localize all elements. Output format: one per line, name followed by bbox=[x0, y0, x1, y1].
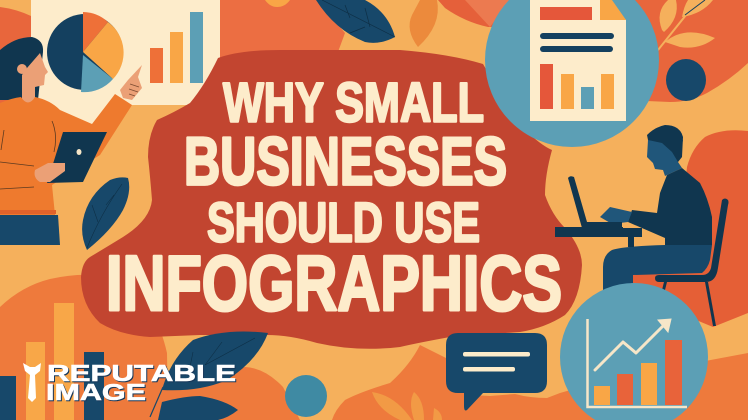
light leaves on orange bbox=[372, 392, 442, 420]
pointing hand bbox=[120, 65, 142, 100]
teal circle bottom bbox=[285, 375, 327, 417]
woman with tablet bbox=[0, 37, 142, 245]
sweater folds bbox=[0, 121, 56, 189]
head bbox=[647, 130, 683, 176]
sweater bbox=[0, 94, 132, 215]
document bbox=[530, 0, 626, 121]
bar chart on board bbox=[150, 12, 203, 83]
icon: necktie bbox=[23, 363, 41, 402]
hair bbox=[0, 37, 43, 100]
logo: Reputable Image bbox=[23, 360, 236, 405]
circle: document badge bbox=[485, 0, 659, 147]
title text bbox=[106, 70, 562, 327]
bars bbox=[594, 386, 610, 405]
bar chart: background bars bottom left bbox=[0, 303, 104, 420]
person at laptop bbox=[555, 125, 728, 326]
dark circle bbox=[666, 59, 706, 101]
speech bubble bbox=[446, 333, 547, 410]
pie chart bbox=[47, 12, 124, 92]
torso bbox=[628, 168, 712, 245]
leaf: top orange bbox=[410, 0, 438, 47]
logo text: IMAGE bbox=[46, 379, 146, 405]
title blob bbox=[81, 50, 582, 349]
tablet bbox=[47, 132, 107, 183]
hand on keyboard bbox=[600, 207, 632, 224]
axes bbox=[588, 319, 687, 407]
chair bbox=[655, 198, 728, 326]
logo text: REPUTABLE bbox=[47, 360, 236, 386]
logo text bbox=[46, 360, 236, 405]
line: infographics: INFOGRAPHICS bbox=[106, 239, 562, 327]
chart board top left bbox=[31, 0, 220, 125]
face and neck bbox=[17, 53, 48, 105]
line: should use: SHOULD USE bbox=[207, 190, 480, 254]
line: why small: WHY SMALL bbox=[223, 70, 484, 134]
leaf: bottom centre bbox=[150, 332, 268, 420]
trend arrow bbox=[595, 325, 664, 370]
holding hand bbox=[35, 163, 65, 182]
trousers bbox=[0, 215, 60, 245]
hair bbox=[647, 125, 683, 162]
laptop bbox=[568, 176, 622, 228]
leaf: top centre bbox=[316, 0, 395, 43]
trousers bbox=[603, 245, 712, 290]
sprig: top right bbox=[658, 0, 715, 50]
leaf: left bbox=[82, 177, 129, 250]
desk bbox=[555, 227, 642, 237]
line: businesses: BUSINESSES bbox=[184, 124, 507, 200]
circle: growth chart badge bbox=[560, 283, 708, 420]
